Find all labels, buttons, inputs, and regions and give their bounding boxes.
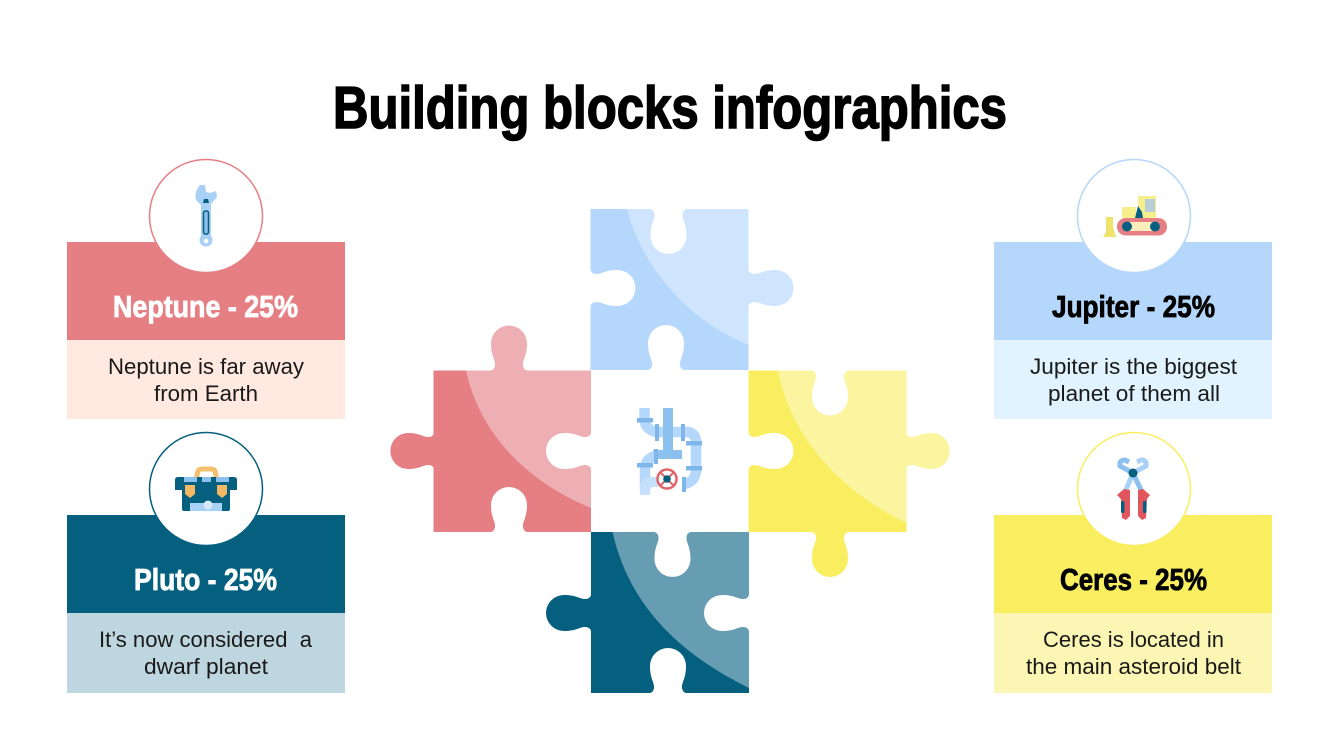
text: Neptune description: Neptune is far away [108, 354, 304, 379]
panel: Jupiter [994, 160, 1272, 419]
icon: wrench badge [150, 160, 262, 272]
text: Jupiter description: planet of them all [1048, 381, 1220, 406]
heading: Ceres: Ceres - 25% [1060, 562, 1207, 597]
icon: pipes and valve [637, 408, 702, 495]
puzzle piece: red left [390, 326, 591, 532]
text: Pluto description: dwarf planet [144, 654, 268, 679]
panel: Neptune [67, 160, 345, 419]
puzzle piece: blue top [590, 209, 794, 370]
puzzle piece: teal bottom [546, 532, 749, 693]
text: Jupiter description [1030, 354, 1237, 406]
text: Jupiter description: Jupiter is the biggest [1030, 354, 1237, 379]
text: Ceres description [1026, 627, 1241, 679]
text: Pluto description [99, 627, 313, 679]
icon: pliers badge [1078, 432, 1190, 546]
text: Pluto description: It’s now considered a [99, 627, 313, 652]
icon: bulldozer badge [1078, 160, 1190, 272]
puzzle piece: yellow right [748, 370, 950, 577]
panel: Pluto [67, 432, 345, 693]
icon: toolbox badge [150, 432, 262, 546]
heading: Pluto: Pluto - 25% [134, 562, 277, 597]
text: Ceres description: the main asteroid belt [1026, 654, 1241, 679]
title: Building blocks infographics [333, 75, 1007, 141]
heading: Jupiter: Jupiter - 25% [1052, 289, 1215, 324]
text: Ceres description: Ceres is located in [1043, 627, 1224, 652]
panel: Ceres [994, 432, 1272, 693]
heading: Neptune: Neptune - 25% [113, 289, 298, 324]
text: Neptune description: from Earth [154, 381, 258, 406]
text: Neptune description [108, 354, 304, 406]
